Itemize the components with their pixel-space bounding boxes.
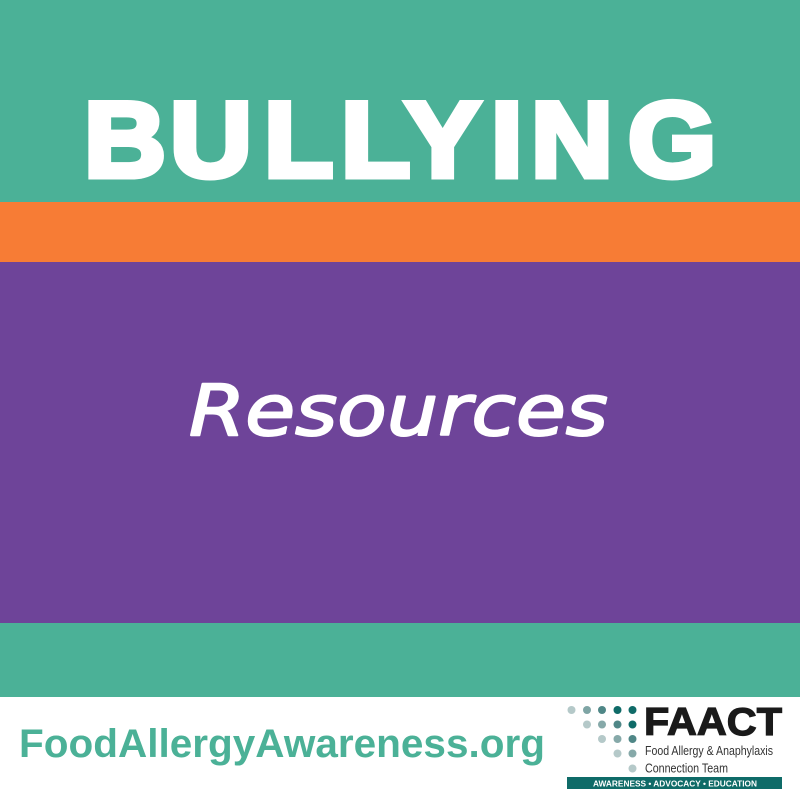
icon: dot grid (568, 706, 636, 772)
purple panel (0, 262, 800, 623)
title: BULLYING (84, 80, 716, 200)
logo tagline: AWARENESS • ADVOCACY • EDUCATION (593, 778, 757, 788)
white footer (0, 697, 800, 800)
top teal band (0, 0, 800, 202)
lower teal band (0, 623, 800, 697)
logo wordmark: FAACT (644, 701, 782, 744)
website address: FoodAllergyAwareness.org (19, 722, 545, 766)
orange band (0, 202, 800, 262)
subtitle: Resources: Resources (189, 370, 608, 452)
logo name line 2: Connection Team (645, 760, 728, 776)
logo tagline bar (567, 777, 782, 789)
FAACT logo (567, 701, 782, 789)
logo name line 1: Food Allergy & Anaphylaxis (645, 743, 773, 758)
